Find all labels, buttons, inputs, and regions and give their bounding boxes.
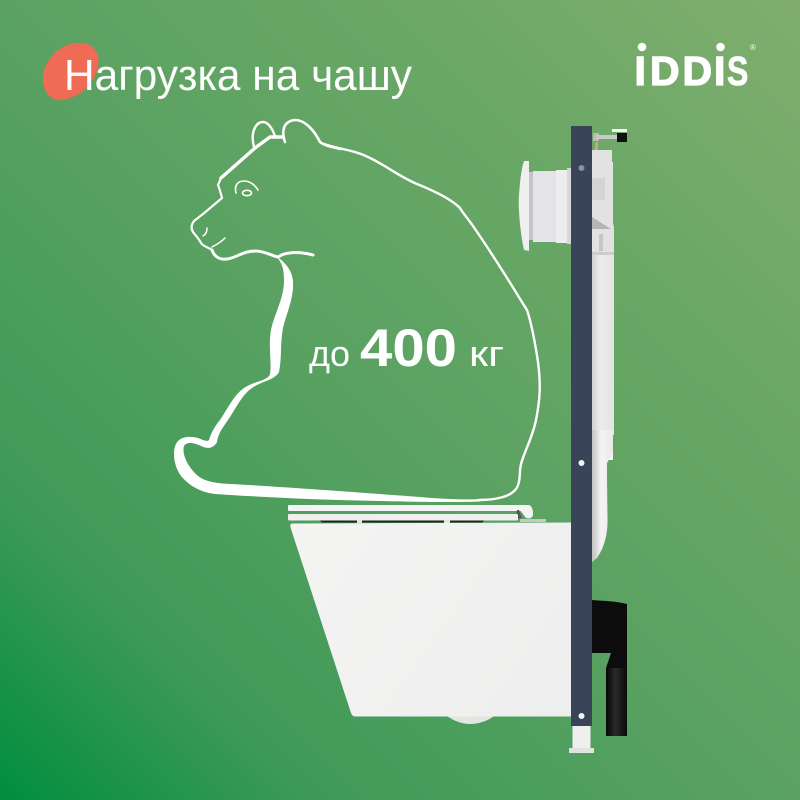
tank valve details [592,217,611,229]
кг: кг [469,333,504,374]
frame post [571,126,592,726]
flush button [519,161,571,251]
registered mark: ® [750,43,756,52]
bear throat line [212,250,313,259]
title with accent blob [43,43,412,100]
logo letters: IDDI [634,48,725,94]
top bolt [578,165,584,171]
400: 400 [360,319,457,378]
seat ring [288,514,518,520]
title text: Нагрузка на чашу [64,51,412,100]
middle bolt [578,460,584,466]
bear forehead thick stroke [221,137,282,178]
load label [309,319,504,378]
black drain pipe [592,600,627,736]
bowl body [290,522,572,716]
cistern tank [592,150,614,460]
bottom bolt [578,713,584,719]
accent blob [43,43,99,100]
до: до [309,333,350,374]
bear mouth and nose [203,228,225,247]
bowl drain bulge [447,716,494,724]
logo dots [638,43,725,51]
logo letter S: S [727,48,748,94]
bear neck, arm and tail, thick band [174,256,480,502]
top valve [593,129,627,151]
bear back outline [324,144,540,500]
logo: IDDIS [634,43,756,94]
hinge [520,519,546,522]
flange [567,168,571,244]
toilet seat [288,505,546,523]
bear ears [253,120,341,149]
bear outline [174,120,540,502]
tank top box [592,150,614,255]
tank body [592,255,614,435]
frame foot [569,726,594,753]
seat lid [288,505,533,518]
button plate [519,161,529,251]
drain pipe [592,430,613,562]
bear eye [235,181,258,196]
mounting frame [569,126,594,753]
toilet bowl [290,522,572,724]
seat buffers [320,520,484,522]
button body [529,172,533,240]
bear head line [192,178,222,250]
